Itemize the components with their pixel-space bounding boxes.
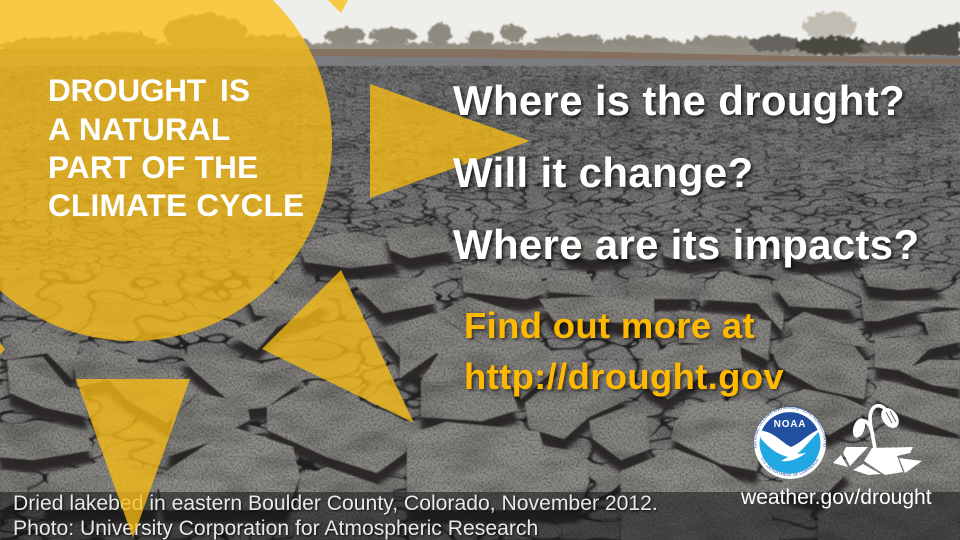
question 1: Where is the drought? — [453, 77, 905, 124]
call to action: http://drought.gov — [464, 356, 784, 397]
sun headline: IS — [220, 72, 250, 108]
grey dry lake strip — [0, 55, 960, 70]
icon: wilting plant on cracked soil — [833, 404, 922, 475]
tree line on the horizon — [0, 12, 960, 58]
sun headline: CLIMATE CYCLE — [48, 187, 304, 223]
far shore strip — [0, 49, 960, 65]
sun ray: top — [328, 0, 348, 13]
question 3: Where are its impacts? — [453, 221, 919, 268]
sun ray: right — [370, 84, 530, 198]
icon: NOAA logo: NOAA — [774, 419, 806, 430]
photo caption — [13, 492, 658, 540]
cracked ground, near blocks — [0, 226, 960, 540]
sun headline — [48, 72, 304, 223]
question 2: Will it change? — [453, 149, 753, 196]
caption bar — [0, 492, 960, 540]
sun disc — [0, 0, 332, 341]
sky — [0, 0, 960, 56]
photo caption: Dried lakebed in eastern Boulder County, Colorado, November 2012. — [13, 492, 658, 515]
call to action — [464, 305, 786, 400]
sun headline: PART OF THE — [48, 149, 258, 185]
photo caption: Photo: University Corporation for Atmospheric Research — [13, 517, 538, 540]
call to action: Find out more at — [464, 305, 755, 346]
icon: NOAA logo: U.S. DEPARTMENT OF COMMERCE — [761, 457, 819, 476]
sun headline: A NATURAL — [48, 111, 230, 147]
sun ray: bottom — [76, 379, 190, 538]
sun ray: left — [0, 343, 5, 355]
icon: NOAA logo — [754, 406, 826, 479]
sun ray: lower right — [262, 270, 414, 423]
website label: weather.gov/drought — [741, 486, 932, 509]
sun headline: DROUGHT — [48, 72, 206, 108]
